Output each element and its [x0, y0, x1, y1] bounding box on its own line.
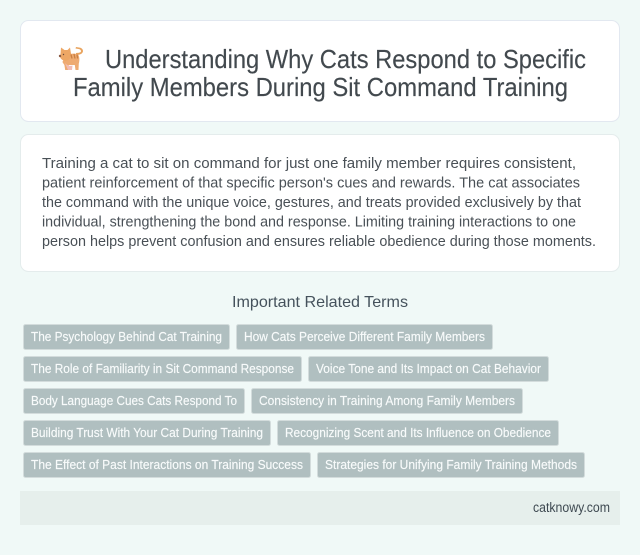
heading: related terms: Important Related Terms — [232, 294, 408, 311]
tag: Strategies for Unifying Family Training Methods — [325, 458, 577, 472]
tag: Recognizing Scent and Its Influence on Obedience — [285, 426, 551, 440]
tag — [252, 388, 522, 414]
description text: individual, strengthening the bond and response. Limiting training interactions to one — [42, 214, 576, 230]
tag — [278, 420, 558, 446]
description text — [42, 155, 596, 250]
description text: patient reinforcement of that specific person's cues and rewards. The cat associates — [42, 174, 580, 192]
tag: Body Language Cues Cats Respond To — [31, 394, 237, 408]
panel: tags — [24, 324, 584, 478]
tag — [24, 356, 302, 382]
tag — [236, 324, 492, 350]
tag: Consistency in Training Among Family Members — [259, 394, 515, 408]
tag — [24, 388, 244, 414]
title text — [73, 44, 586, 102]
tag: The Effect of Past Interactions on Training Success — [31, 458, 303, 472]
tag: Voice Tone and Its Impact on Cat Behavior — [316, 362, 541, 376]
tag — [24, 452, 310, 478]
title text: Understanding Why Cats Respond to Specific — [105, 44, 586, 74]
tag — [24, 420, 270, 446]
tag: How Cats Perceive Different Family Members — [244, 330, 485, 344]
tag — [308, 356, 548, 382]
description text: the command with the unique voice, gestures, and treats provided exclusively by that — [42, 194, 582, 211]
title text: Family Members During Sit Command Training — [73, 72, 568, 102]
tag — [318, 452, 584, 478]
description text: Training a cat to sit on command for just one family member requires consistent, — [42, 155, 576, 172]
tag — [24, 324, 230, 350]
tag: The Role of Familiarity in Sit Command Response — [31, 362, 294, 376]
tag: The Psychology Behind Cat Training — [31, 330, 222, 344]
footer — [20, 491, 620, 525]
footer source text: catknowy.com — [533, 500, 610, 515]
panel: title card — [20, 20, 620, 122]
tag: Building Trust With Your Cat During Training — [31, 426, 263, 440]
description text: person helps prevent confusion and ensures reliable obedience during those moments. — [42, 233, 596, 250]
panel: description card — [20, 134, 620, 272]
icon: cat — [59, 47, 83, 70]
